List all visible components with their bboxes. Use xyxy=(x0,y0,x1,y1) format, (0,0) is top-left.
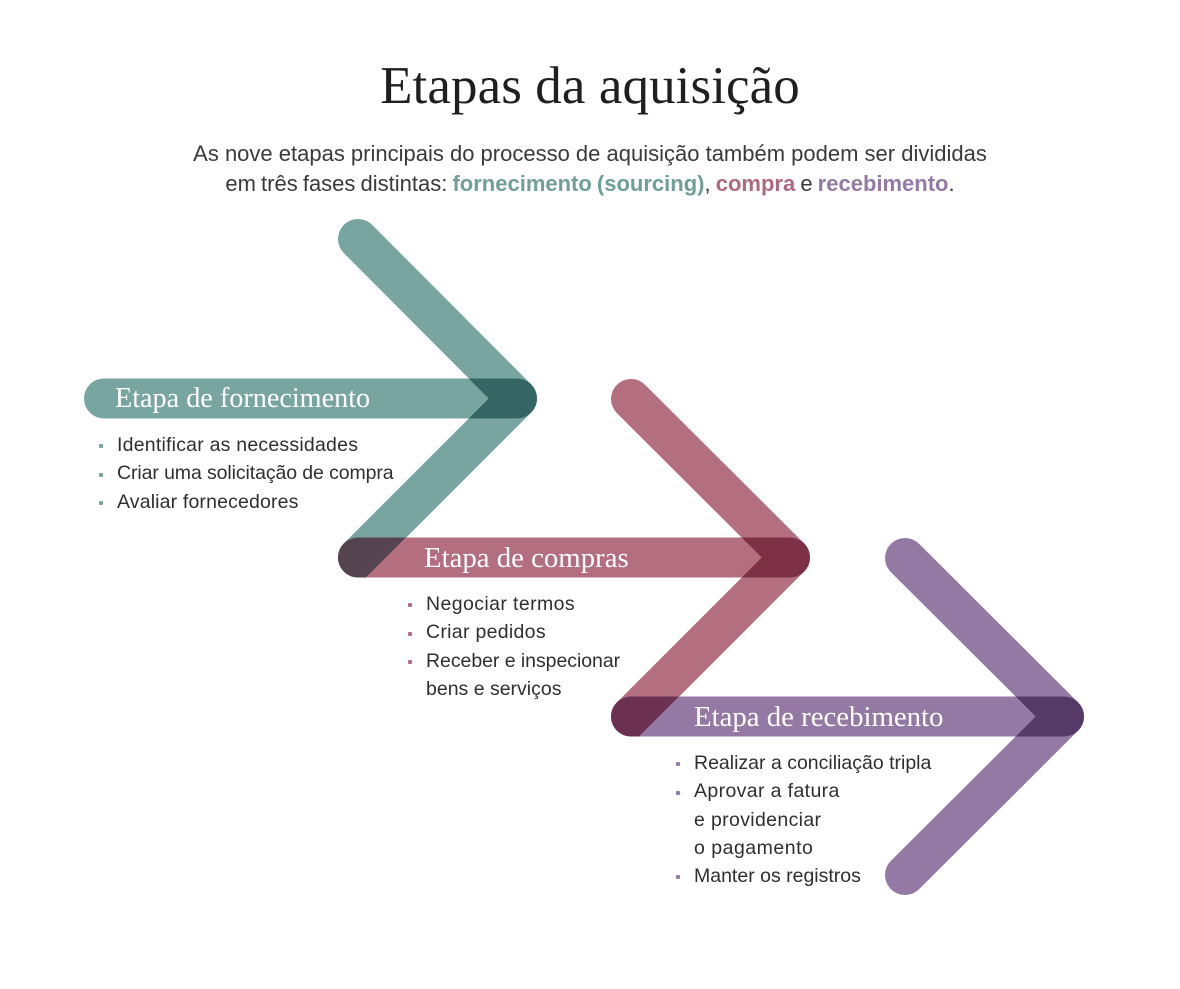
list: compras: bens e serviços xyxy=(426,678,561,700)
list: fornecimento xyxy=(117,434,394,513)
heading: compras: Etapa de compras xyxy=(424,542,629,574)
intro text: As nove etapas principais do processo de aquisição também podem ser divididas xyxy=(193,141,987,166)
list: recebimento xyxy=(694,752,932,887)
overlap: compras start xyxy=(338,538,406,578)
list: recebimento: Manter os registros xyxy=(694,865,861,887)
heading: recebimento: Etapa de recebimento xyxy=(694,701,943,733)
list: compras: Receber e inspecionar xyxy=(426,650,620,672)
arrow: fornecimento xyxy=(104,239,517,558)
list: compras xyxy=(426,593,620,700)
arrow: recebimento xyxy=(631,558,1064,875)
list: recebimento: Aprovar a fatura xyxy=(694,780,840,802)
overlap: fornecimento tip xyxy=(469,378,537,418)
title: Etapas da aquisição xyxy=(380,57,800,115)
list: fornecimento: Criar uma solicitação de compra xyxy=(117,462,394,484)
list: compras: Criar pedidos xyxy=(426,621,546,643)
list: recebimento: e providenciar xyxy=(694,809,821,831)
overlap: recebimento tip xyxy=(1016,696,1084,736)
list: fornecimento: Avaliar fornecedores xyxy=(117,491,298,513)
overlap: compras tip xyxy=(742,538,810,578)
list: compras: Negociar termos xyxy=(426,593,575,615)
overlap: recebimento start xyxy=(611,696,679,736)
intro text xyxy=(193,141,987,196)
bullets xyxy=(99,444,680,879)
arrow: compras xyxy=(358,399,790,716)
list: recebimento: o pagamento xyxy=(694,837,813,859)
heading: fornecimento: Etapa de fornecimento xyxy=(115,383,370,414)
intro text: em três fases distintas: fornecimento (sourcing), compra e recebimento. xyxy=(225,170,955,196)
list: fornecimento: Identificar as necessidades xyxy=(117,434,358,456)
list: recebimento: Realizar a conciliação tripla xyxy=(694,752,931,774)
